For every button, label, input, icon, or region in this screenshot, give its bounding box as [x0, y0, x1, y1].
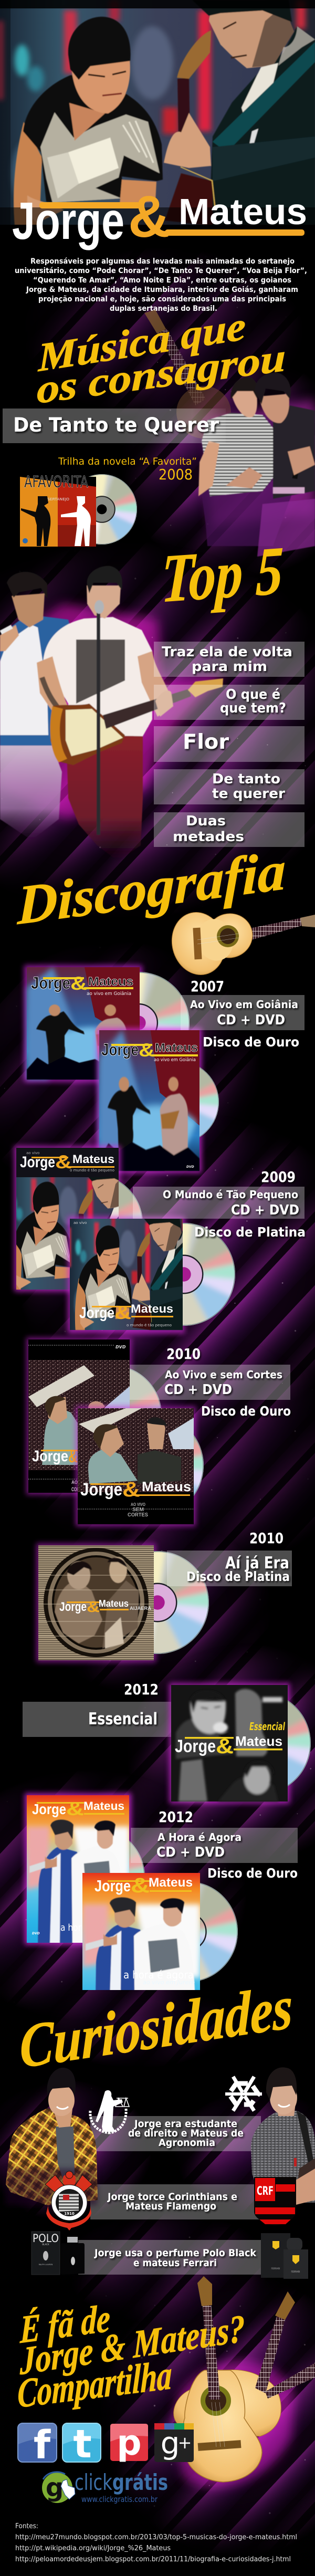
- panel: top 5 songs: Flor: [183, 730, 229, 754]
- album: 2009 o mundo e tao pequeno: Mateus: [72, 1153, 114, 1166]
- heading: share call to action: Jorge & Mateus?: [19, 2307, 245, 2383]
- album: 2009 o mundo e tao pequeno: Jorge: [20, 1154, 55, 1171]
- sources: http://peloamordedeusjem.blogspot.com.br/2011/11/biografia-e-curiosidades-j.html: [15, 2556, 291, 2563]
- panel: top 5 songs: Traz ela de volta: [162, 644, 292, 660]
- icon: pinterest: [110, 2423, 148, 2463]
- heading: musica que os consagrou: Música que: [37, 303, 246, 380]
- panel: curiosity 1: de direito e Mateus de: [128, 2128, 244, 2139]
- intro text: Jorge & Mateus, da cidade de Itumbiara, interior de Goiás, ganharam: [26, 286, 298, 294]
- panel: 2009 details: CD + DVD: [231, 1202, 299, 1218]
- panel: top 5 songs: te querer: [212, 786, 285, 802]
- panel: top 5 songs: [154, 642, 304, 847]
- icon: facebook: f: [34, 2423, 51, 2468]
- logo: clickgratis: www.clickgratis.com.br: [81, 2495, 158, 2504]
- album: 2009 dvd: [68, 1210, 248, 1339]
- album: 2010 dvd: Jorge: [80, 1480, 122, 1500]
- logo: clickgratis: [42, 2469, 168, 2504]
- album: a favorita: AFAVORITA: [24, 473, 88, 491]
- panel: top 5 songs: que tem?: [220, 700, 286, 716]
- panel: top 5 songs: De tanto: [212, 771, 280, 787]
- soundtrack caption: 2008: [159, 466, 193, 483]
- panel: ai ja era details: Disco de Platina: [186, 1569, 290, 1584]
- photo: mateus in grey sweater: [251, 2067, 315, 2205]
- panel: a hora e agora details: A Hora é Agora: [158, 1831, 242, 1844]
- panel: 2010 ao vivo details: Ao Vivo e sem Cortes: [165, 1368, 282, 1381]
- intro text: [15, 257, 307, 313]
- panel: essencial details: Essencial: [88, 1710, 158, 1729]
- album: 2012 a hora e agora: a hor: [60, 1922, 82, 1933]
- heading: share call to action: Compartilha: [17, 2352, 172, 2416]
- album: 2009 o mundo e tao pequeno: ao vivo: [26, 1151, 39, 1155]
- heading: share call to action: [17, 2297, 245, 2416]
- album: a favorita: [20, 465, 146, 553]
- panel: a hora e agora details: CD + DVD: [156, 1845, 225, 1860]
- intro text: Responsáveis por algumas das levadas mais animadas do sertanejo: [30, 257, 295, 266]
- band logo: Mateus: [178, 191, 307, 232]
- panel: 2010 ao vivo details: Disco de Ouro: [201, 1404, 291, 1419]
- album: 2009 dvd: o mundo é tão pequeno: [127, 1323, 172, 1327]
- icon: corinthians badge: 1910: [64, 2212, 75, 2216]
- album: 2012 a hora dvd: &: [131, 1874, 150, 1897]
- icon: twitter: t: [73, 2422, 92, 2467]
- panel: 2007 details: [181, 978, 304, 1050]
- panel: ai ja era details: Aí já Era: [225, 1554, 289, 1573]
- album: a favorita: SERTANEJO: [47, 497, 70, 501]
- panel: 2010 ao vivo details: 2010: [166, 1345, 201, 1363]
- album: 2010 ai ja era: &: [87, 1598, 100, 1616]
- header fade to black: [0, 225, 315, 230]
- panel: 2007 details: CD + DVD: [217, 1012, 285, 1028]
- intro text: duplas sertanejas do Brasil.: [110, 305, 217, 313]
- panel: top 5 songs: Duas: [186, 813, 226, 829]
- album: 2012 a hora dvd: a hora é agora: [123, 1968, 194, 1981]
- album: 2007 dvd: Jorge: [101, 1040, 139, 1059]
- icon: flamengo badge: [254, 2177, 296, 2226]
- heading: musica que os consagrou: [37, 303, 286, 412]
- panel: 2007 details: 2007: [191, 978, 224, 995]
- panel: curiosity 3: Jorge usa o perfume Polo Black: [93, 2247, 256, 2259]
- intro text: projeção nacional e, hoje, são considerados uma das principais: [38, 295, 286, 303]
- album: 2012 a hora dvd: ao vivo em Jurerê: [143, 1979, 195, 1986]
- album: 2012 a hora e agora: [25, 1793, 158, 1953]
- panel: 2010 ao vivo details: [130, 1345, 291, 1419]
- album: 2010 ao vivo sem cortes: Jorge: [32, 1448, 68, 1465]
- panel: 2010 ao vivo details: CD + DVD: [164, 1382, 232, 1398]
- album: 2012 a hora e agora: Mateus: [83, 1799, 124, 1813]
- heading: share call to action: É fã de: [19, 2297, 110, 2352]
- album: 2010 ao vivo sem cortes: DVD: [116, 1345, 126, 1349]
- icon: acoustic guitar: [165, 907, 315, 980]
- icon: corinthians badge: [45, 2171, 92, 2231]
- album: 2010 dvd: Mateus: [142, 1479, 191, 1494]
- photo: duo with microphones: [198, 373, 315, 557]
- panel: ai ja era details: [167, 1530, 292, 1586]
- logo: clickgratis: g: [46, 2473, 64, 2502]
- sources: [15, 2522, 297, 2563]
- album: 2012 a hora dvd: Jorge: [94, 1877, 131, 1895]
- icon: ferrari perfume: [261, 2233, 308, 2279]
- panel: curiosity 3: e mateus Ferrari: [133, 2257, 217, 2269]
- intro text: “Querendo Te Amar”, “Amo Noite E Dia”, entre outras, os goianos: [33, 276, 291, 285]
- panel: essencial details: [23, 1681, 172, 1737]
- album: 2010 dvd: AO VIVO: [131, 1502, 145, 1507]
- album: 2012 a hora e agora: DVD: [32, 1932, 40, 1935]
- album: 2007 ao vivo em goiania: Mateus: [88, 975, 133, 988]
- album: 2012 essencial: Essencial: [249, 1720, 286, 1733]
- heading: musica que os consagrou: os consagrou: [37, 334, 286, 412]
- icon: flamengo badge: CRF: [257, 2185, 274, 2198]
- album: 2007 ao vivo em goiania: &: [70, 972, 87, 994]
- panel: curiosity 2: Jorge torce Corinthians e: [107, 2191, 237, 2203]
- icon: google plus: g: [161, 2425, 180, 2461]
- icon: polo black perfume: [32, 2232, 85, 2275]
- photo: duo with guitar: [0, 566, 226, 861]
- album: 2010 dvd: SEM: [132, 1507, 144, 1513]
- album: 2012 essencial: [169, 1679, 315, 1807]
- album: 2010 ao vivo sem cortes: [26, 1337, 174, 1495]
- panel: curiosity 3: [78, 2240, 261, 2275]
- panel: curiosity 1: Agronomia: [159, 2137, 215, 2149]
- album: 2009 dvd: Jorge: [79, 1304, 114, 1322]
- band logo: Jorge: [12, 192, 124, 250]
- panel: 2009 details: 2009: [261, 1168, 296, 1186]
- album: 2007 dvd: DVD: [186, 1165, 194, 1169]
- panel: a hora e agora details: [131, 1808, 298, 1881]
- panel: ai ja era details: 2010: [249, 1530, 284, 1547]
- panel: 2009 details: [133, 1168, 306, 1240]
- album: 2009 dvd: &: [114, 1302, 131, 1323]
- album: 2009 dvd: Mateus: [131, 1302, 173, 1315]
- album: 2010 ao vivo sem cortes: AO: [71, 1480, 78, 1485]
- band logo: [12, 184, 307, 250]
- album: 2012 a hora e agora: Jorge: [32, 1801, 66, 1817]
- album: 2007 dvd: ao vivo em Goiânia: [154, 1057, 196, 1063]
- album: 2007 dvd: &: [139, 1039, 155, 1061]
- icon: ferrari perfume: FERRARI: [271, 2267, 280, 2270]
- icon: google plus: [154, 2423, 194, 2462]
- album: 2010 dvd: [76, 1401, 216, 1530]
- album: 2012 a hora dvd: [82, 1873, 238, 1990]
- album: 2010 ai ja era: [36, 1538, 222, 1667]
- panel: curiosity 2: Mateus Flamengo: [125, 2201, 216, 2212]
- album: 2010 ao vivo sem cortes: COI: [71, 1486, 78, 1493]
- panel: top 5 songs: O que é: [226, 687, 280, 703]
- band logo: &: [128, 184, 170, 249]
- album: 2009 o mundo e tao pequeno: o mundo é tão pequeno: [70, 1168, 114, 1172]
- panel: song title bar: De Tanto te Querer: [13, 414, 219, 436]
- header photo: [0, 0, 315, 228]
- soundtrack caption: [58, 456, 197, 483]
- panel: 2009 details: O Mundo é Tão Pequeno: [163, 1188, 298, 1201]
- panel: 2007 details: Disco de Ouro: [203, 1034, 299, 1050]
- sources: http://pt.wikipedia.org/wiki/Jorge_%26_Mateus: [15, 2544, 171, 2552]
- album: 2012 essencial: Mateus: [235, 1733, 282, 1749]
- icon: agronomy emblem: [225, 2077, 262, 2111]
- sources: http://meu27mundo.blogspot.com.br/2013/03/top-5-musicas-do-jorge-e-mateus.html: [15, 2533, 297, 2541]
- album: 2012 essencial: Jorge: [175, 1736, 216, 1756]
- heading: top 5: Top 5: [160, 533, 284, 617]
- album: 2007 ao vivo em goiania: ao vivo em Goiânia: [87, 991, 131, 997]
- panel: song title bar: [3, 409, 226, 443]
- icon: polo black perfume: POLO: [33, 2232, 59, 2245]
- icon: ferrari perfume: FERRARI: [291, 2270, 300, 2273]
- icon: polo black perfume: RALPH LAUREN: [39, 2264, 53, 2266]
- album: 2007 ao vivo em goiania: [24, 959, 202, 1086]
- panel: curiosity 1: Jorge era estudante: [133, 2118, 237, 2130]
- album: 2010 ai ja era: AIJÁERA: [130, 1606, 152, 1611]
- album: 2007 ao vivo em goiania: Jorge: [31, 973, 70, 992]
- album: 2010 ai ja era: Mateus: [99, 1598, 129, 1609]
- panel: curiosity 1: [90, 2116, 261, 2151]
- icon: google plus: +: [178, 2433, 192, 2453]
- guitar behind heading: [144, 310, 231, 438]
- album: 2012 a hora e agora: &: [66, 1798, 84, 1819]
- panel: a hora e agora details: 2012: [159, 1808, 193, 1826]
- album: 2010 dvd: CORTES: [128, 1512, 148, 1518]
- panel: 2007 details: Ao Vivo em Goiânia: [190, 998, 298, 1011]
- album: 2007 dvd: Mateus: [155, 1041, 198, 1054]
- panel: top 5 songs: metades: [173, 829, 244, 845]
- panel: 2009 details: Disco de Platina: [194, 1224, 306, 1240]
- logo: clickgratis: clickgrátis: [75, 2469, 168, 2495]
- album: 2010 dvd: &: [122, 1478, 140, 1501]
- album: 2009 o mundo e tao pequeno: &: [55, 1151, 72, 1172]
- album: 2007 dvd: [97, 1028, 229, 1173]
- icon: lady justice: [90, 2090, 129, 2133]
- illustration: three guitars: [173, 2276, 315, 2487]
- icon: pinterest: p: [117, 2423, 142, 2463]
- album: 2012 essencial: &: [216, 1735, 234, 1758]
- soundtrack caption: Trilha da novela “A Favorita”: [58, 456, 197, 467]
- panel: top 5 songs: para mim: [192, 659, 267, 675]
- album: 2009 dvd: ao vivo: [74, 1221, 87, 1225]
- album: 2012 a hora dvd: Mateus: [149, 1876, 193, 1890]
- album: 2009 o mundo e tao pequeno: [3, 1146, 155, 1292]
- heading: discografia: Discografia: [17, 839, 286, 936]
- panel: a hora e agora details: Disco de Ouro: [207, 1866, 298, 1881]
- sources: Fontes:: [15, 2522, 38, 2530]
- panel: curiosity 2: [90, 2184, 261, 2219]
- album: 2010 ai ja era: Jorge: [59, 1600, 87, 1614]
- album: 2010 ao vivo sem cortes: &: [68, 1447, 78, 1467]
- icon: facebook: [18, 2423, 57, 2468]
- photo: jorge in plaid shirt: [5, 2068, 98, 2205]
- icon: twitter: [62, 2422, 101, 2467]
- icon: polo black perfume: BLACK: [42, 2243, 49, 2246]
- panel: essencial details: 2012: [124, 1681, 159, 1698]
